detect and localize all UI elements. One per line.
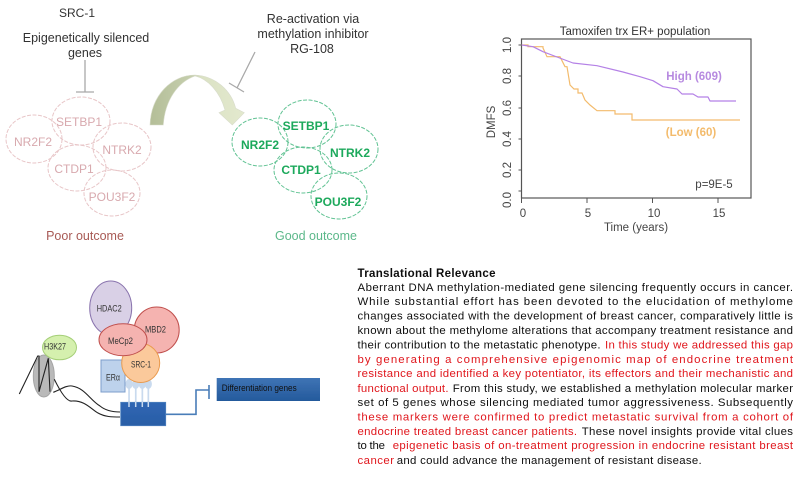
paragraph: In this study we addressed this gap: [605, 340, 793, 352]
protein: HDAC2: [90, 281, 132, 335]
x axis labels: 15: [713, 208, 725, 220]
box: differentiation genes: Differentiation genes: [222, 383, 297, 394]
protein: HDAC2: HDAC2: [97, 304, 122, 315]
chart: survival curves: [486, 26, 751, 234]
label: epigenetically silenced genes: Epigenetically silenced: [23, 31, 149, 45]
gene cluster: good outcome: [232, 100, 378, 219]
protein: ER alpha: [101, 360, 125, 392]
gene cluster: good outcome: NR2F2: [241, 138, 279, 152]
paragraph: to the: [358, 440, 385, 452]
label: re-activation via methylation inhibitor: methylation inhibitor: [257, 27, 369, 41]
paragraph: These novel insights provide vital clues: [582, 426, 793, 438]
plot frame and axis ticks: [518, 39, 751, 203]
gene cluster: poor outcome: NTRK2: [102, 143, 142, 157]
label: epigenetically silenced genes: genes: [68, 46, 102, 60]
curved arrow: [150, 75, 244, 125]
label: poor outcome: Poor outcome: [46, 229, 124, 243]
y axis labels: 0.4: [502, 130, 514, 147]
promoter ticks: [129, 402, 148, 407]
box: differentiation genes: [217, 378, 320, 401]
label: SRC-1: SRC-1: [59, 6, 95, 20]
gene cluster: poor outcome: NR2F2: [14, 135, 52, 149]
inhibition bar: silenced genes: [76, 60, 94, 92]
label: re-activation via methylation inhibitor: RG-108: [290, 42, 334, 56]
panel: silencing and re-activation diagram: [6, 6, 378, 243]
gene promoter box: [121, 402, 166, 426]
protein: MeCp2: [99, 324, 147, 356]
paragraph: these markers were confirmed to predict metastatic survival from a cohort of: [358, 412, 794, 424]
x axis labels: Time (years): [604, 222, 668, 234]
curve: low group: [522, 45, 740, 120]
methylation pins: [125, 379, 152, 407]
paragraph: From this study, we established a methylation molecular marker: [453, 383, 793, 395]
y axis labels: 1.0: [502, 37, 514, 53]
label: good outcome: Good outcome: [275, 229, 357, 243]
nucleosome: [33, 355, 54, 397]
label: re-activation via methylation inhibitor: Re-activation via: [267, 12, 359, 26]
gene cluster: poor outcome: POU3F2: [89, 190, 136, 204]
protein: MBD2: [134, 307, 179, 353]
inhibition bar: RG-108: [229, 52, 255, 92]
gene cluster: poor outcome: CTDP1: [54, 162, 94, 176]
paragraph: resistance and identified a key potentiator, its effectors and their mechanistic and: [358, 368, 793, 380]
protein: MBD2: MBD2: [145, 325, 166, 336]
gene cluster: good outcome: POU3F2: [315, 195, 362, 209]
paragraph: cancer: [358, 455, 394, 467]
gene cluster: poor outcome: SETBP1: [56, 115, 102, 129]
x axis labels: 5: [585, 208, 591, 220]
paragraph: While substantial effort has been devoted to the elucidation of methylome: [358, 296, 793, 308]
repression connector: [166, 385, 209, 414]
y axis labels: 0.2: [502, 162, 514, 178]
y axis labels: DMFS: [486, 105, 498, 138]
paragraph: Aberrant DNA methylation-mediated gene silencing frequently occurs in cancer.: [358, 282, 793, 294]
label: low group: (Low (60): [666, 127, 716, 139]
chart title: Tamoxifen trx ER+ population: [560, 26, 710, 38]
p value: p=9E-5: [695, 179, 733, 191]
paragraph: epigenetic basis of on-treatment progression in endocrine resistant breast: [393, 440, 794, 452]
protein: SRC-1: SRC-1: [131, 360, 151, 371]
paragraph: by generating a comprehensive epigenomic map of endocrine treatment: [358, 354, 794, 366]
paragraph: and could advance the management of resistant disease.: [397, 455, 702, 467]
paragraph: functional output.: [358, 383, 448, 395]
heading: Translational Relevance: [358, 268, 496, 280]
y axis labels: 0.6: [502, 100, 514, 116]
x axis labels: [520, 208, 725, 234]
gene cluster: good outcome: NTRK2: [330, 146, 370, 160]
y axis labels: 0.8: [502, 68, 514, 84]
paragraph: endocrine treated breast cancer patients.: [358, 426, 577, 438]
marker: H3K27: [42, 335, 76, 360]
protein: SRC-1: [122, 344, 160, 382]
panel: molecular mechanism diagram: [19, 281, 320, 426]
x axis labels: 0: [520, 208, 526, 220]
paragraph: changes associated with the development of breast cancer, comparatively little is: [358, 310, 793, 322]
curve: high group: [522, 45, 736, 101]
gene cluster: good outcome: CTDP1: [281, 163, 321, 177]
y axis labels: 0.0: [502, 192, 514, 208]
gene cluster: poor outcome: [6, 97, 151, 216]
gene cluster: good outcome: SETBP1: [283, 119, 330, 133]
protein: ER alpha: ERα: [106, 373, 120, 384]
text block: translational relevance: [358, 268, 794, 467]
DNA strand: [19, 356, 120, 417]
y axis labels: [486, 37, 514, 208]
paragraph: [358, 282, 794, 467]
marker: H3K27: H3K27: [44, 341, 66, 352]
label: high group: High (609): [666, 71, 722, 83]
paragraph: known about the methylome alterations that accompany treatment resistance and: [358, 325, 793, 337]
paragraph: their contribution to the metastatic phenotype.: [358, 340, 600, 352]
protein: MeCp2: MeCp2: [108, 336, 133, 347]
paragraph: set of 5 genes whose silencing mediated tumor aggressiveness. Subsequently: [358, 397, 793, 409]
x axis labels: 10: [648, 208, 660, 220]
